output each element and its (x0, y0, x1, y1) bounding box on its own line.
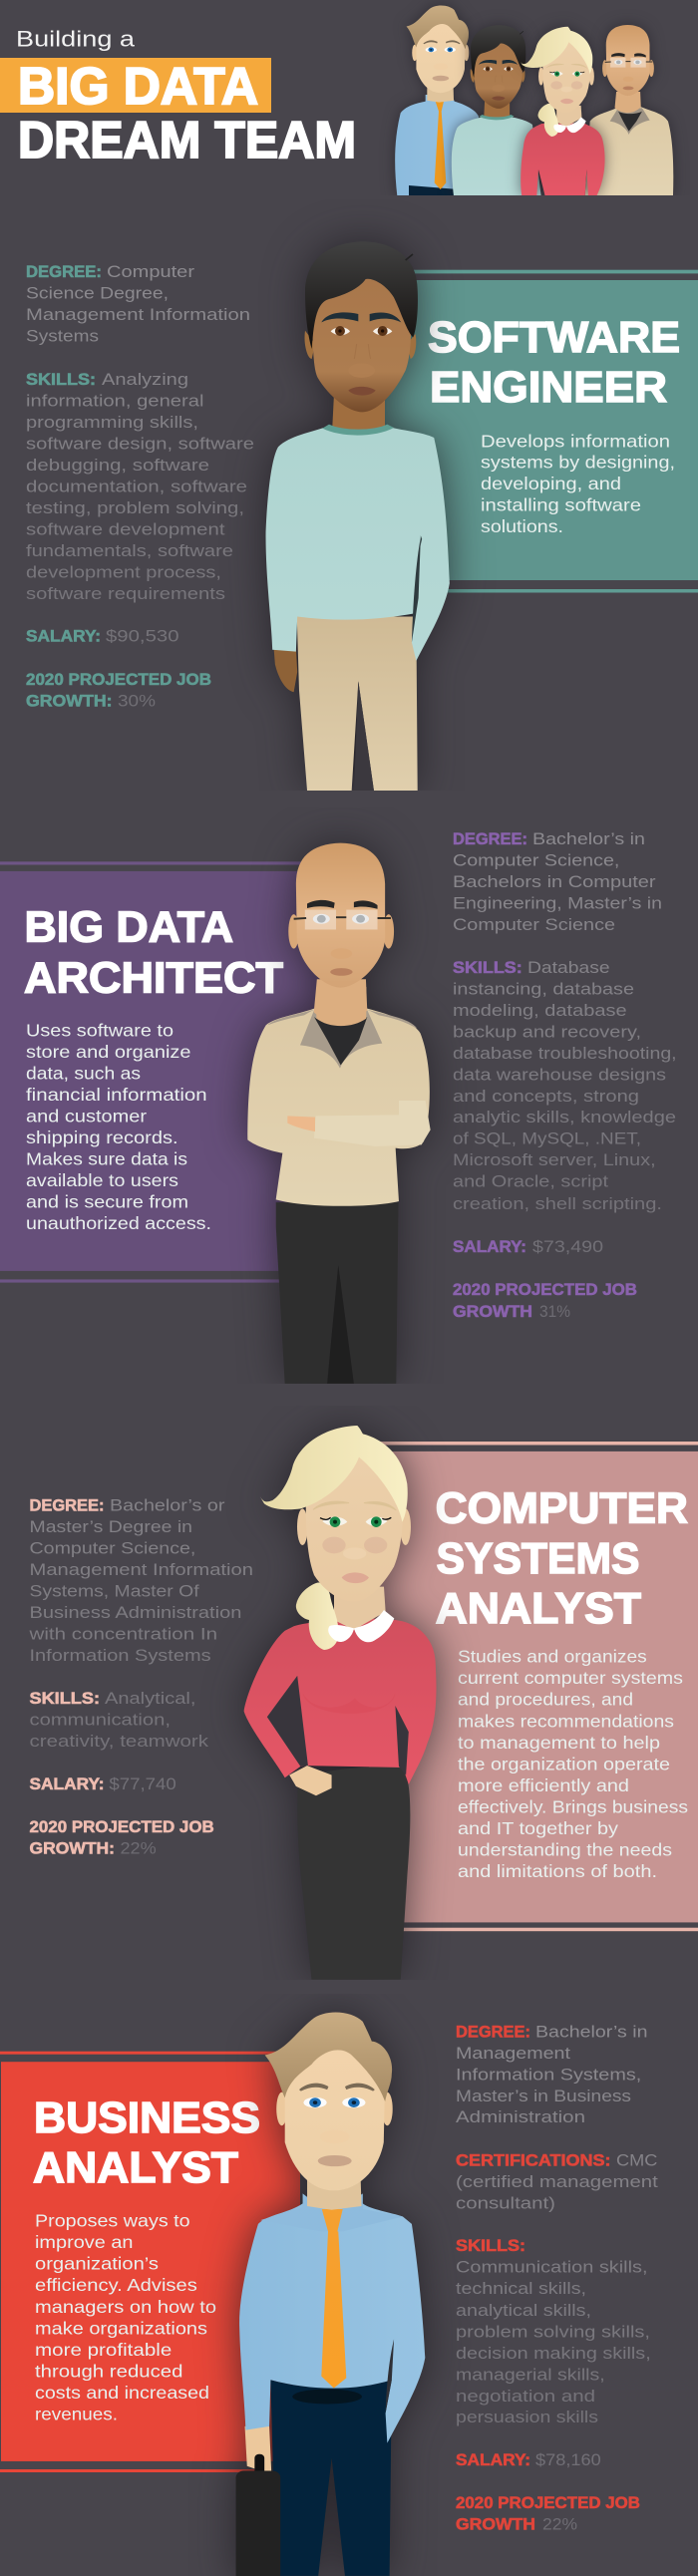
description: software engineer: solutions. (481, 516, 563, 536)
description: big data architect: financial information (26, 1085, 207, 1105)
heading: big data architect: BIG DATA (24, 903, 233, 952)
text block: business analyst details: consultant) (456, 2193, 555, 2213)
text block: software engineer details: information, general (26, 392, 204, 411)
description: software engineer (481, 431, 675, 536)
text block: business analyst details: SKILLS: (456, 2236, 525, 2255)
head: computer systems analyst (260, 1426, 411, 1650)
description: business analyst: costs and increased (35, 2383, 209, 2403)
text block: computer systems analyst details: with concentration In (28, 1625, 217, 1644)
text block: business analyst details: CERTIFICATIONS: (456, 2150, 610, 2169)
text block: computer systems analyst details: Analytical, (105, 1689, 195, 1708)
description: big data architect: store and organize (26, 1042, 191, 1062)
text block: business analyst details: SALARY: (456, 2450, 530, 2469)
description: computer systems analyst: Studies and organizes (458, 1647, 647, 1667)
panel: computer systems analyst: ANALYST (436, 1584, 641, 1633)
description: computer systems analyst: effectively. Brings business (458, 1796, 688, 1816)
panel: business analyst: ANALYST (33, 2143, 238, 2192)
description: business analyst (35, 2211, 216, 2424)
text block: software engineer details: DEGREE: (26, 262, 102, 281)
text block: computer systems analyst details: GROWTH: (30, 1839, 115, 1858)
description: computer systems analyst: and IT together by (458, 1818, 618, 1838)
text block: big data architect details: Computer Science, (453, 851, 619, 870)
heading: computer systems analyst: COMPUTER (436, 1483, 688, 1532)
text block: business analyst details: problem solving skills, (456, 2322, 650, 2341)
description: computer systems analyst: more efficiently and (458, 1775, 629, 1795)
head: software engineer (304, 241, 418, 436)
text block: computer systems analyst details: Computer Science, (30, 1539, 195, 1558)
text block: big data architect details: SKILLS: (453, 958, 523, 977)
panel: software engineer: ENGINEER (430, 363, 667, 412)
text block: computer systems analyst details (28, 1496, 253, 1858)
description: computer systems analyst: the organization operate (458, 1754, 670, 1773)
title line: BIG DATA: BIG DATA (18, 58, 258, 116)
text block: big data architect details: database troubleshooting, (453, 1044, 677, 1063)
description: business analyst: through reduced (35, 2361, 183, 2381)
text block: software engineer details: software development (26, 520, 225, 539)
heading: business analyst: BUSINESS (34, 2093, 260, 2142)
description: computer systems analyst: makes recommendations (458, 1711, 674, 1731)
text block: computer systems analyst details: 2020 PROJECTED JOB (30, 1817, 214, 1836)
text block: big data architect details: Bachelors in Computer (453, 872, 656, 891)
description: computer systems analyst: current computer systems (458, 1668, 683, 1688)
description: big data architect: Uses software to (26, 1021, 174, 1041)
text block: computer systems analyst details: Systems, Master Of (30, 1582, 199, 1601)
text block: business analyst details: 2020 PROJECTED JOB (456, 2493, 640, 2512)
description: big data architect: Makes sure data is (26, 1148, 187, 1168)
description: computer systems analyst: and limitations of both. (458, 1861, 657, 1881)
text block: big data architect details: GROWTH (453, 1302, 532, 1321)
text block: computer systems analyst details: creativity, teamwork (30, 1732, 209, 1751)
text block: big data architect details: and concepts, strong (453, 1087, 639, 1106)
text block: computer systems analyst details: Master’s Degree in (30, 1517, 192, 1536)
text block: business analyst details: GROWTH (456, 2514, 535, 2533)
description: big data architect: available to users (26, 1170, 178, 1190)
description: computer systems analyst (458, 1647, 688, 1881)
text block: business analyst details: (certified management (456, 2172, 658, 2191)
text block: business analyst details: technical skills, (456, 2279, 586, 2298)
text block: business analyst details: decision making skills, (456, 2344, 651, 2363)
description: computer systems analyst: to management to help (458, 1733, 660, 1753)
text block: big data architect details: Database (527, 958, 610, 977)
text block: software engineer details: $90,530 (106, 627, 179, 646)
text block: business analyst details: negotiation and (456, 2387, 595, 2406)
text block: computer systems analyst details: Information Systems (30, 1646, 211, 1665)
text block: business analyst details: Administration (456, 2107, 585, 2126)
description: business analyst: make organizations (35, 2318, 207, 2338)
text block: business analyst details: Information Systems, (456, 2066, 641, 2085)
text block: software engineer details: documentation, software (26, 478, 247, 496)
panel: business analyst (0, 2052, 300, 2472)
panel: big data architect: ARCHITECT (24, 954, 283, 1003)
figure: software engineer (266, 241, 450, 791)
text block: big data architect details: Bachelor’s in (532, 829, 645, 848)
panel: software engineer (379, 270, 698, 592)
description: big data architect: shipping records. (26, 1127, 178, 1147)
text block: business analyst details: 22% (542, 2514, 577, 2533)
text block: big data architect details: modeling, database (453, 1001, 627, 1020)
header: group portrait of four team members (395, 5, 673, 196)
text block: big data architect details: creation, shell scripting. (453, 1194, 662, 1213)
title line: DREAM TEAM: DREAM TEAM (18, 112, 356, 169)
figure: big data architect (247, 843, 431, 1384)
description: software engineer: developing, and (481, 474, 621, 493)
figure: business analyst (236, 2013, 425, 2576)
text block: software engineer details: testing, problem solving, (26, 498, 244, 517)
text block: business analyst details: $78,160 (535, 2450, 601, 2469)
description: business analyst: organization’s (35, 2254, 159, 2274)
text block: big data architect details: instancing, database (453, 980, 634, 999)
text block: business analyst details: managerial skills, (456, 2365, 605, 2384)
text block: big data architect details: Microsoft server, Linux, (453, 1150, 656, 1169)
text block: business analyst details: Management (456, 2044, 570, 2063)
text block: computer systems analyst details: SALARY: (30, 1774, 104, 1793)
text block: software engineer details: Science Degree, (26, 284, 169, 303)
text block: software engineer details: programming skills, (26, 413, 198, 432)
text block: big data architect details: data warehouse designs (453, 1065, 666, 1084)
text block: business analyst details: CMC (616, 2150, 657, 2169)
description: business analyst: more profitable (35, 2340, 172, 2360)
text block: software engineer details: Management Information (26, 305, 250, 324)
text block: software engineer details: SALARY: (26, 627, 101, 646)
heading: software engineer: SOFTWARE (428, 313, 680, 362)
description: business analyst: Proposes ways to (35, 2211, 190, 2231)
panel: computer systems analyst: SYSTEMS (437, 1534, 640, 1583)
text block: computer systems analyst details: Business Administration (30, 1603, 241, 1622)
text block: business analyst details: persuasion skills (456, 2408, 598, 2426)
description: business analyst: efficiency. Advises (35, 2275, 197, 2295)
description: big data architect: unauthorized access. (26, 1213, 211, 1233)
text block: software engineer details: 2020 PROJECTED JOB (26, 670, 211, 689)
text block: big data architect details: and Oracle, script (453, 1172, 608, 1191)
text block: software engineer details: GROWTH: (26, 692, 112, 711)
text block: software engineer details: Computer (107, 262, 194, 281)
text block: big data architect details: 31% (539, 1302, 570, 1321)
title line: Building a: Building a (16, 27, 136, 52)
text block: computer systems analyst details: DEGREE: (30, 1496, 104, 1515)
panel: computer systems analyst (369, 1442, 698, 1931)
panel: big data architect (0, 861, 329, 1283)
text block: software engineer details: Systems (26, 327, 99, 345)
text block: computer systems analyst details: 22% (120, 1839, 157, 1858)
pants (276, 1202, 399, 1384)
text block: business analyst details (456, 2023, 658, 2533)
text block: business analyst details: Communication skills, (456, 2258, 648, 2277)
head: big data architect (288, 843, 394, 1022)
text block: computer systems analyst details: SKILLS: (30, 1689, 100, 1708)
body: sweater and skirt (244, 1619, 436, 1980)
text block: big data architect details: DEGREE: (453, 829, 527, 848)
text block: software engineer details: software requirements (26, 584, 225, 603)
text block: business analyst details: analytical skills, (456, 2301, 591, 2320)
description: big data architect (26, 1021, 211, 1233)
text block: business analyst details: DEGREE: (456, 2023, 530, 2042)
description: big data architect: and is secure from (26, 1191, 188, 1211)
text block: business analyst details: Master’s in Business (456, 2087, 631, 2105)
sweater with folded arms (247, 987, 431, 1206)
text block: computer systems analyst details: Bachelor’s or (110, 1496, 225, 1515)
description: big data architect: and customer (26, 1107, 147, 1127)
figure: computer systems analyst (244, 1426, 436, 1980)
text block: computer systems analyst details: communication, (30, 1711, 171, 1730)
description: software engineer: systems by designing, (481, 453, 675, 473)
text block: big data architect details: backup and recovery, (453, 1023, 641, 1041)
text block: big data architect details: Engineering, Master’s in (453, 894, 662, 913)
text block: big data architect details: analytic skills, knowledge (453, 1108, 676, 1127)
text block: big data architect details: of SQL, MySQL, .NET, (453, 1129, 641, 1148)
head: business analyst (265, 2013, 393, 2210)
description: business analyst: managers on how to (35, 2297, 216, 2317)
text block: software engineer details: 30% (118, 692, 156, 711)
text block: software engineer details: development process, (26, 563, 221, 582)
text block: big data architect details: Computer Science (453, 915, 615, 934)
text block: big data architect details (453, 829, 677, 1321)
description: business analyst: improve an (35, 2232, 134, 2252)
text block: big data architect details: $73,490 (532, 1237, 603, 1256)
text block: software engineer details: Analyzing (102, 370, 188, 389)
title banner (0, 58, 271, 113)
text block: software engineer details: fundamentals, software (26, 541, 233, 560)
description: software engineer: Develops information (481, 431, 670, 451)
text block: software engineer details: software design, software (26, 435, 254, 454)
header: title (0, 27, 356, 169)
description: business analyst: revenues. (35, 2405, 118, 2424)
description: big data architect: data, such as (26, 1063, 141, 1083)
text block: big data architect details: 2020 PROJECTED JOB (453, 1280, 637, 1299)
text block: big data architect details: SALARY: (453, 1237, 526, 1256)
description: computer systems analyst: understanding the needs (458, 1839, 672, 1859)
description: software engineer: installing software (481, 495, 641, 515)
text block: software engineer details: debugging, software (26, 456, 209, 475)
description: computer systems analyst: and procedures, and (458, 1690, 633, 1710)
text block: software engineer details (26, 262, 254, 711)
body: shirt, tie, pants and briefcase (236, 2193, 425, 2576)
body: sweater and pants (266, 427, 450, 791)
text block: software engineer details: SKILLS: (26, 370, 96, 389)
text block: business analyst details: Bachelor’s in (535, 2023, 648, 2042)
text block: computer systems analyst details: Management Information (30, 1560, 253, 1579)
text block: computer systems analyst details: $77,740 (109, 1774, 176, 1793)
